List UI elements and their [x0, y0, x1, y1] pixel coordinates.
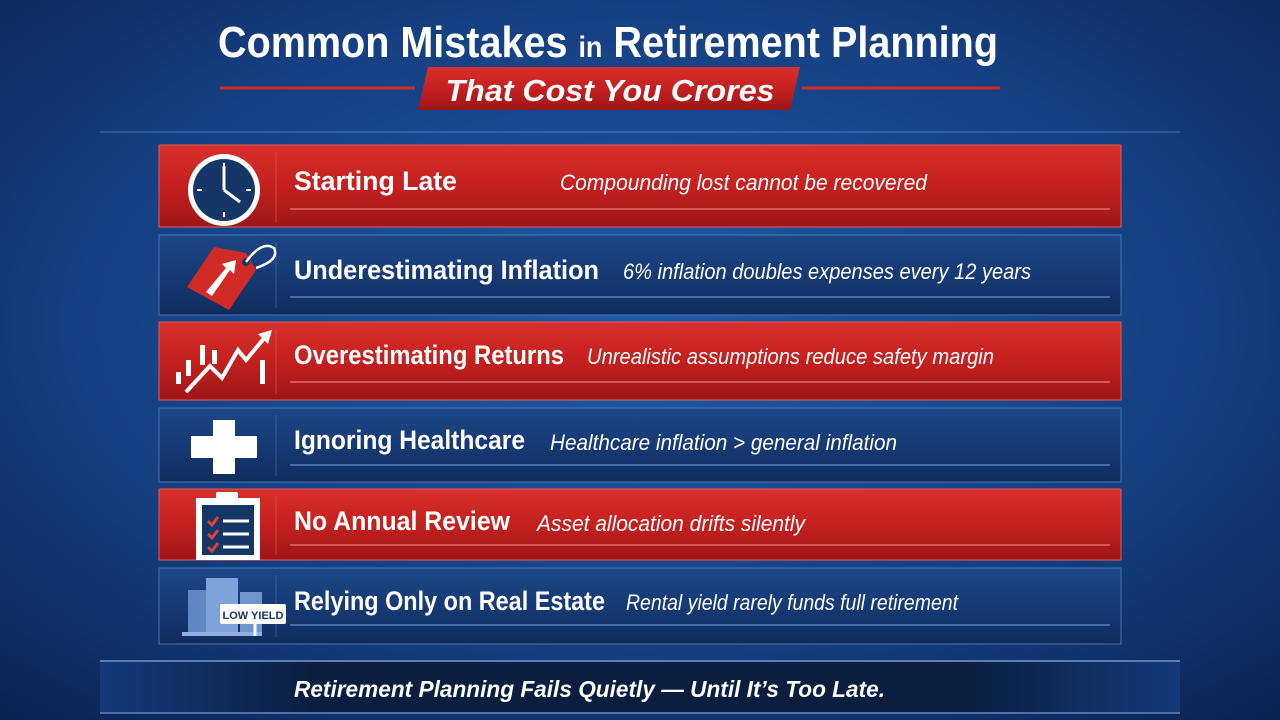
description: 6% inflation doubles expenses every 12 years	[623, 259, 1031, 284]
icon: price tag	[187, 246, 275, 310]
icon: clock	[188, 154, 260, 226]
heading: Overestimating Returns	[294, 340, 564, 370]
subtitle banner	[220, 67, 1000, 110]
description: Healthcare inflation > general inflation	[550, 430, 897, 455]
footer banner	[100, 661, 1180, 713]
heading: Starting Late	[294, 166, 457, 196]
title: Common Mistakes in Retirement Planning	[218, 18, 998, 67]
heading: Underestimating Inflation	[294, 255, 599, 285]
description: Rental yield rarely funds full retirement	[626, 590, 959, 615]
row 5: annual review	[159, 489, 1121, 560]
description: Asset allocation drifts silently	[535, 511, 807, 536]
row 2: inflation	[159, 235, 1121, 315]
icon: buildings with low yield sign: LOW YIELD	[223, 610, 284, 622]
icon: buildings with low yield sign	[182, 578, 286, 636]
icon: checklist	[196, 492, 260, 560]
icon: medical cross	[191, 420, 257, 474]
row 1: starting late	[159, 145, 1121, 227]
icon: chart	[176, 330, 272, 392]
heading: No Annual Review	[294, 506, 511, 536]
heading: Ignoring Healthcare	[294, 425, 525, 455]
footer banner: Retirement Planning Fails Quietly — Until It’s Too Late.	[294, 676, 885, 702]
description: Unrealistic assumptions reduce safety margin	[587, 344, 994, 369]
heading: Relying Only on Real Estate	[294, 586, 605, 616]
row 3: returns	[159, 322, 1121, 400]
row 6: real estate	[159, 568, 1121, 644]
row 4: healthcare	[159, 408, 1121, 482]
description: Compounding lost cannot be recovered	[560, 170, 928, 195]
subtitle banner: That Cost You Crores	[446, 73, 774, 108]
